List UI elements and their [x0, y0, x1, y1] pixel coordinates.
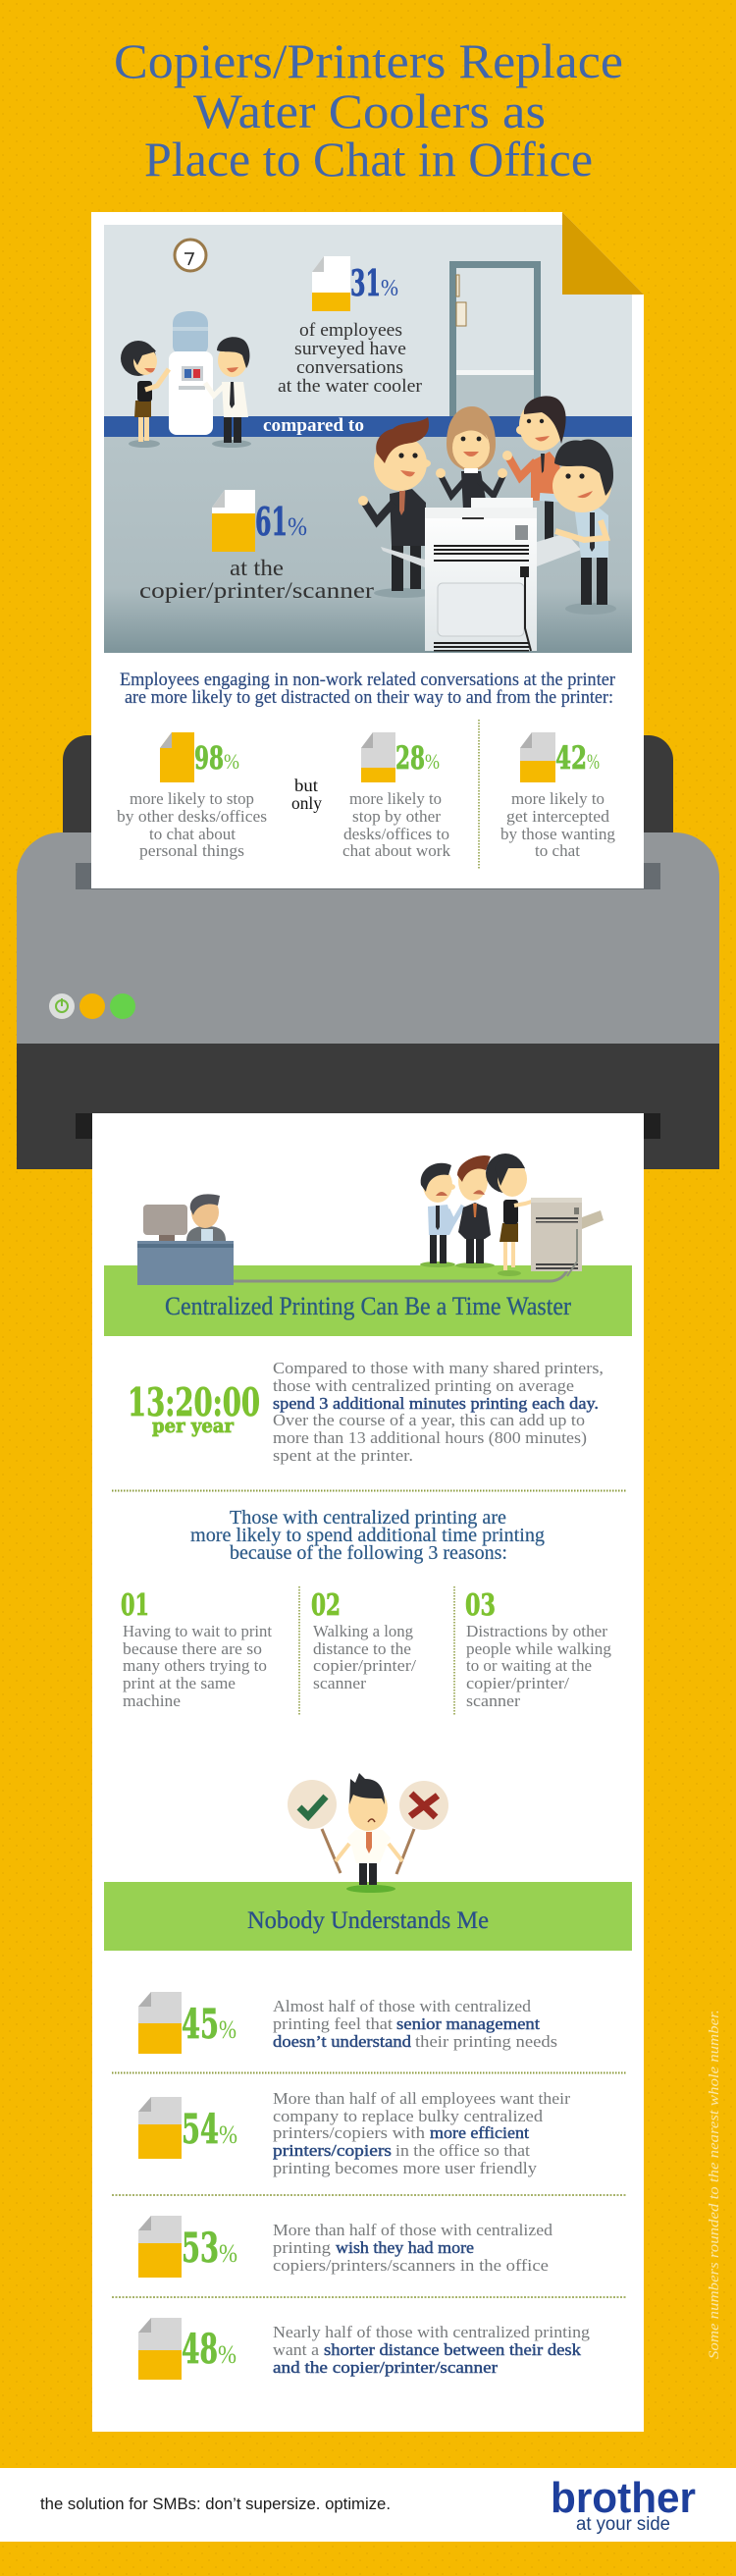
floor cable	[234, 1266, 569, 1281]
text: time paragraph	[273, 1359, 604, 1465]
text: 42% caption: get intercepted	[506, 807, 610, 826]
tagline: the solution for SMBs: don’t supersize. optimize.	[40, 2495, 391, 2513]
group: man with brown hair	[358, 417, 433, 598]
reason 03: to or waiting at the	[466, 1656, 592, 1675]
stat: 61%: 61	[255, 500, 288, 545]
reason 03: Distractions by other	[466, 1622, 607, 1640]
text: 98% caption: more likely to stop	[130, 789, 254, 808]
office scene	[104, 225, 632, 653]
title	[114, 33, 623, 187]
brother logo: brother	[551, 2474, 696, 2522]
text: row 53: copiers/printers/scanners in the office	[273, 2256, 549, 2275]
panel: bottom paper	[92, 1113, 644, 2432]
printer lower base	[17, 1044, 719, 1169]
reason 02	[311, 1588, 416, 1692]
sign: cross	[396, 1781, 448, 1874]
text: row 45: printing feel that	[273, 2014, 393, 2033]
reason 01: print at the same	[123, 1674, 236, 1692]
stat row: 48%: %	[218, 2340, 237, 2369]
text: of employees	[278, 320, 423, 397]
text: row 54: in the office so that	[395, 2141, 530, 2160]
title: Place to Chat in Office	[144, 132, 593, 187]
text: row 54	[273, 2089, 570, 2177]
panel: top paper	[91, 212, 644, 888]
stat: 42%: 42	[555, 739, 587, 777]
text: compared to: compared to	[263, 415, 364, 436]
reason 02: copier/printer/	[313, 1656, 416, 1675]
divider	[112, 1490, 627, 1492]
text: row 45: doesn’t understand	[273, 2032, 412, 2051]
stat: 31%	[312, 256, 398, 311]
reason 02: distance to the	[313, 1639, 411, 1658]
text: 28% caption	[342, 789, 450, 860]
man with yes/no signs	[288, 1773, 448, 1893]
stat: 13:20:00 per year	[128, 1380, 260, 1437]
printer upper body	[17, 735, 719, 1044]
text: but only	[291, 776, 322, 813]
text: row 54: more efficient	[430, 2123, 529, 2142]
water cooler	[169, 311, 213, 435]
stat: 28%: %	[425, 749, 440, 774]
stat row: 53%: 53	[182, 2225, 219, 2272]
heading: time waster: Centralized Printing Can Be a Time Waster	[165, 1292, 571, 1320]
heading: nobody understands me: Nobody Understands Me	[247, 1907, 489, 1934]
woman at cooler	[121, 341, 169, 448]
text: at the copier	[139, 556, 374, 603]
brother logo: at your side	[576, 2514, 670, 2535]
heading: employees engaging: are more likely to get distracted on their way to and from the printer:	[125, 687, 613, 708]
text: time paragraph: spend 3 additional minutes printing each day.	[273, 1394, 599, 1413]
text: row 53: printing	[273, 2238, 332, 2257]
stat: 28%	[342, 732, 450, 860]
copier	[425, 498, 537, 652]
text: of employees: surveyed have	[294, 339, 406, 359]
text: row 48: want a	[273, 2340, 319, 2359]
stat: 13:20:00 per year: 13:20:00	[128, 1380, 260, 1425]
stat row: 45%: %	[219, 2015, 237, 2044]
reason 03: copier/printer/	[466, 1674, 569, 1692]
text: 98% caption: by other desks/offices	[117, 807, 267, 826]
text: 28% caption: desks/offices to	[343, 825, 449, 843]
woman	[486, 1154, 538, 1276]
text: time paragraph: Over the course of a year, this can add up to	[273, 1411, 585, 1429]
text: 98% caption	[117, 789, 267, 860]
stat: 31%: 31	[350, 263, 381, 304]
stat row: 48%: 48	[182, 2326, 218, 2373]
worried man in suit	[455, 1155, 495, 1268]
reason 01: 01	[121, 1588, 149, 1623]
band: time waster	[104, 1265, 632, 1336]
copier side trays	[381, 533, 581, 567]
heading: three reasons: more likely to spend additional time printing	[190, 1525, 545, 1546]
group: man in orange	[502, 396, 566, 543]
side note: Some numbers rounded to the nearest whole number.	[707, 2010, 722, 2359]
band: nobody understands me	[104, 1882, 632, 1951]
text: row 45: Almost half of those with centralized	[273, 1997, 532, 2015]
stat row: 45%: 45	[182, 2001, 219, 2048]
stat row: 54%	[138, 2089, 570, 2177]
text: row 48: shorter distance between their desk	[324, 2340, 582, 2359]
reason 01: Having to wait to print	[123, 1622, 272, 1640]
stat: 61%	[212, 490, 307, 552]
text: row 48: and the copier/printer/scanner	[273, 2358, 498, 2377]
text: row 48	[273, 2323, 591, 2377]
small copier	[531, 1198, 604, 1276]
text: row 54: printers/copiers with	[273, 2123, 426, 2142]
text: time paragraph: more than 13 additional hours (800 minutes)	[273, 1428, 587, 1447]
title: Water Coolers as	[193, 83, 546, 138]
stat: 42%	[500, 732, 616, 860]
stat row: 53%: %	[219, 2239, 237, 2268]
heading: three reasons: Those with centralized printing are	[230, 1507, 506, 1529]
group: man in blue shirt	[540, 439, 616, 615]
reason 01: machine	[123, 1691, 181, 1710]
text: time paragraph: Compared to those with many shared printers,	[273, 1359, 604, 1377]
divider	[112, 2296, 627, 2298]
group: woman	[436, 406, 507, 510]
reason 02: scanner	[313, 1674, 366, 1692]
stat row: 54%: %	[219, 2120, 237, 2149]
text: 42% caption	[500, 789, 616, 860]
text: but only: only	[291, 793, 322, 813]
heading: employees engaging: Employees engaging in non-work related conversations at the printer	[120, 670, 616, 690]
desk worker	[137, 1194, 234, 1285]
door	[449, 261, 541, 418]
stat: 31%: %	[381, 276, 398, 301]
printer buttons	[49, 993, 135, 1019]
text: at the copier: copier/printer/scanner	[139, 578, 374, 603]
divider	[453, 1586, 455, 1715]
text: of employees: conversations	[296, 357, 403, 378]
clock	[175, 240, 206, 271]
text: row 54: company to replace bulky centralized	[273, 2107, 544, 2125]
stat row: 54%: 54	[182, 2106, 219, 2153]
text: time paragraph: those with centralized printing on average	[273, 1376, 574, 1395]
sign: check	[288, 1780, 341, 1873]
worried man in blue shirt	[420, 1163, 463, 1267]
text: 28% caption: more likely to	[349, 789, 442, 808]
text: row 54: More than half of all employees want their	[273, 2089, 570, 2108]
stat: 98%: %	[224, 749, 239, 774]
stat: 98%	[117, 732, 267, 860]
stat row: 45%	[138, 1992, 557, 2054]
text: row 45: their printing needs	[415, 2032, 557, 2051]
heading: employees engaging	[120, 670, 616, 708]
text: at the copier: at the	[230, 556, 284, 580]
stat: 42%: %	[587, 749, 600, 774]
footer bar	[0, 2468, 736, 2542]
heading: three reasons: because of the following 3 reasons:	[230, 1542, 507, 1564]
text: 28% caption: chat about work	[342, 841, 450, 860]
text: 98% caption: personal things	[139, 841, 244, 860]
stat row: 53%	[138, 2216, 553, 2278]
text: row 53: More than half of those with centralized	[273, 2221, 553, 2239]
text: but only: but	[294, 776, 318, 795]
text: time paragraph: spent at the printer.	[273, 1446, 413, 1465]
reason 01: many others trying to	[123, 1656, 267, 1675]
stat row: 48%	[138, 2318, 591, 2380]
wall stripe	[104, 416, 632, 437]
text: row 45: senior management	[396, 2014, 540, 2033]
text: row 54: printers/copiers	[273, 2141, 392, 2160]
divider	[298, 1586, 300, 1715]
reason 03: scanner	[466, 1691, 520, 1710]
text: row 53	[273, 2221, 553, 2275]
paper fold	[562, 212, 644, 295]
title: Copiers/Printers Replace	[114, 33, 623, 88]
stat: 13:20:00 per year: per year	[152, 1414, 234, 1437]
man at cooler	[205, 337, 251, 448]
stat: 61%: %	[288, 512, 307, 541]
stat: 28%: 28	[395, 739, 425, 777]
reason 01	[121, 1588, 272, 1710]
reason 03	[465, 1588, 611, 1710]
text: 28% caption: stop by other	[352, 807, 441, 826]
text: 42% caption: more likely to	[511, 789, 605, 808]
text: of employees: of employees	[299, 320, 402, 341]
reason 02: Walking a long	[313, 1622, 413, 1640]
text: row 54: printing becomes more user friendly	[273, 2159, 538, 2177]
text: row 45	[273, 1997, 557, 2051]
stat: 98%: 98	[194, 739, 224, 777]
divider	[112, 2071, 627, 2073]
waiting group	[420, 1154, 604, 1276]
reason 03: people while walking	[466, 1639, 611, 1658]
text: of employees: at the water cooler	[278, 376, 423, 397]
text: row 48: Nearly half of those with centralized printing	[273, 2323, 591, 2341]
divider	[112, 2194, 627, 2196]
reason 03: 03	[465, 1588, 496, 1623]
reason 01: because there are so	[123, 1639, 262, 1658]
heading: three reasons	[190, 1507, 545, 1564]
text: 42% caption: by those wanting	[500, 825, 616, 843]
divider	[478, 720, 480, 869]
text: 98% caption: to chat about	[149, 825, 236, 843]
text: row 53: wish they had more	[336, 2238, 474, 2257]
reason 02: 02	[311, 1588, 341, 1623]
text: 42% caption: to chat	[535, 841, 580, 860]
